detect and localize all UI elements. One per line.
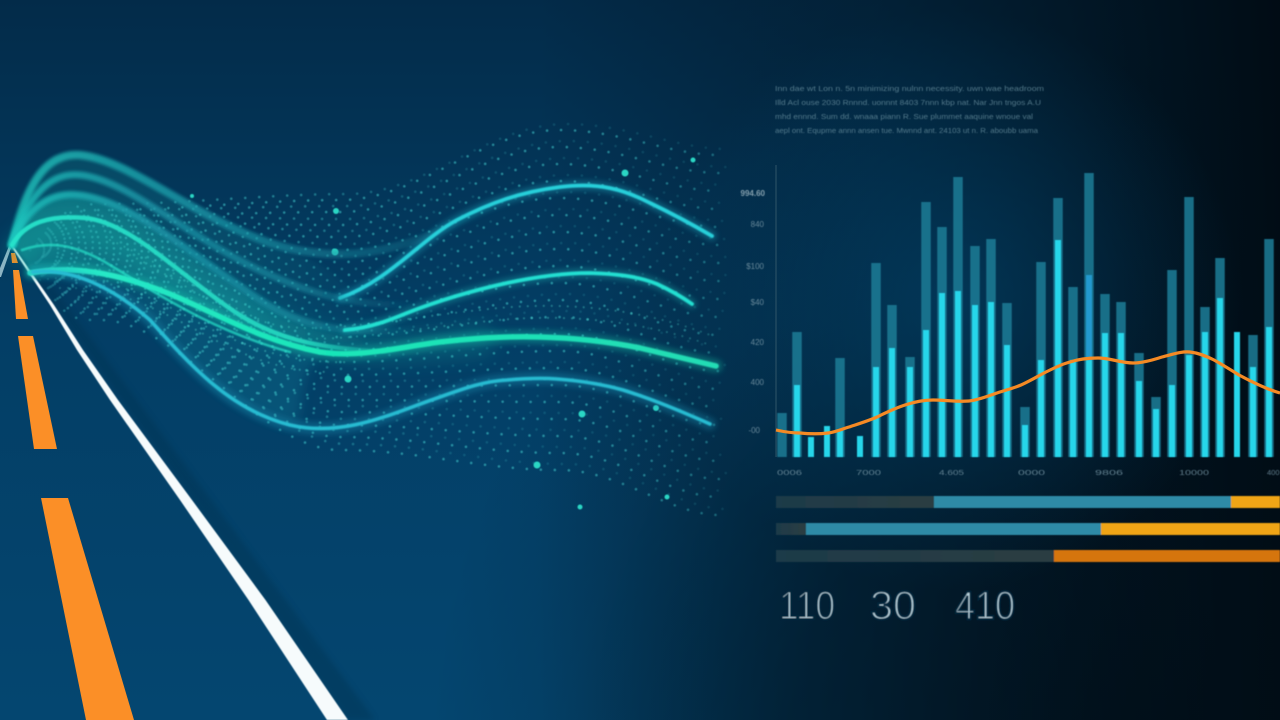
big numbers: 410 (955, 584, 1015, 628)
flowing wave ribbons (12, 155, 716, 429)
x axis labels: 400 (1267, 468, 1280, 477)
x axis labels (777, 468, 1280, 477)
progress bar 1 (776, 496, 1280, 508)
y axis line (775, 165, 777, 457)
text block: Inn dae wt Lon n. 5n minimizing nulnn necessity. uwn wae headroom (775, 84, 1044, 93)
bars: background dim (782, 173, 1269, 457)
road shadow beside white line (30, 270, 375, 720)
text block: aepl ont. Equpme annn ansen tue. Mwnnd ant. 24103 ut n. R. aboubb uama (775, 126, 1039, 135)
road dash 2 (13, 270, 28, 319)
road dash 3 (18, 336, 57, 449)
wave glow: main green (30, 270, 716, 366)
bar chart (741, 165, 1280, 477)
x axis labels: 4.605 (939, 468, 964, 477)
wave: middle line (345, 273, 692, 330)
y axis labels: $40 (751, 298, 765, 307)
wave: upper bright blue (340, 185, 712, 298)
x axis labels: 0000 (1018, 468, 1045, 477)
ribbon glow (20, 227, 480, 347)
x axis labels: 7000 (856, 468, 881, 477)
ribbon fill: bright fan (12, 195, 385, 348)
x axis labels: 10000 (1179, 468, 1209, 477)
y axis labels: $100 (746, 262, 765, 271)
big numbers: 110 (779, 584, 835, 628)
road dash 4 (41, 498, 134, 720)
ribbon fills (12, 155, 385, 425)
bars: foreground cyan (797, 240, 1269, 457)
ribbon fill: upper fan (12, 155, 385, 342)
road edge: thin left line (0, 246, 11, 277)
wave: second dim band (12, 175, 410, 305)
wave: third dim band (12, 195, 410, 331)
text block: mhd ennnd. Sum dd. wnaaa piann R. Sue plummet aaquine wnoue val (775, 112, 1033, 121)
trend line (776, 352, 1280, 434)
y axis labels: 400 (751, 378, 765, 387)
wave glow: middle line (345, 273, 692, 330)
y axis labels: 994.60 (741, 189, 766, 198)
y axis labels (741, 189, 766, 435)
progress bar 2 (776, 523, 1280, 535)
horizontal progress bars (776, 496, 1280, 562)
dense bright dots in the ribbon (40, 240, 710, 372)
wave: upper green (12, 217, 400, 352)
y axis labels: -00 (748, 426, 761, 435)
big numbers: 30 (870, 584, 916, 628)
wave: lower blue (33, 271, 710, 429)
ribbon fill: lower fan (30, 270, 320, 425)
progress bar 3 (776, 550, 1280, 562)
large glowing dots (190, 158, 696, 510)
wave: main green (30, 270, 716, 366)
road edge: white line (11, 245, 348, 720)
dot field (30, 124, 727, 515)
big numbers (779, 584, 1015, 628)
text block (775, 84, 1044, 135)
wave: crossing green (22, 245, 290, 352)
text block: Illd Acl ouse 2030 Rnnnd. uonnnt 8403 7nnn kbp nat. Nar Jnn tngos A.U (775, 98, 1041, 107)
y axis labels: 420 (751, 338, 765, 347)
x axis labels: 9806 (1095, 468, 1123, 477)
x axis labels: 0006 (777, 468, 802, 477)
wave: top dim band (12, 155, 490, 254)
y axis labels: 840 (751, 220, 765, 229)
road dash 1 (11, 253, 18, 263)
wave glow: upper blue (340, 185, 712, 298)
road (0, 245, 375, 720)
wave glow: lower blue (33, 271, 710, 429)
